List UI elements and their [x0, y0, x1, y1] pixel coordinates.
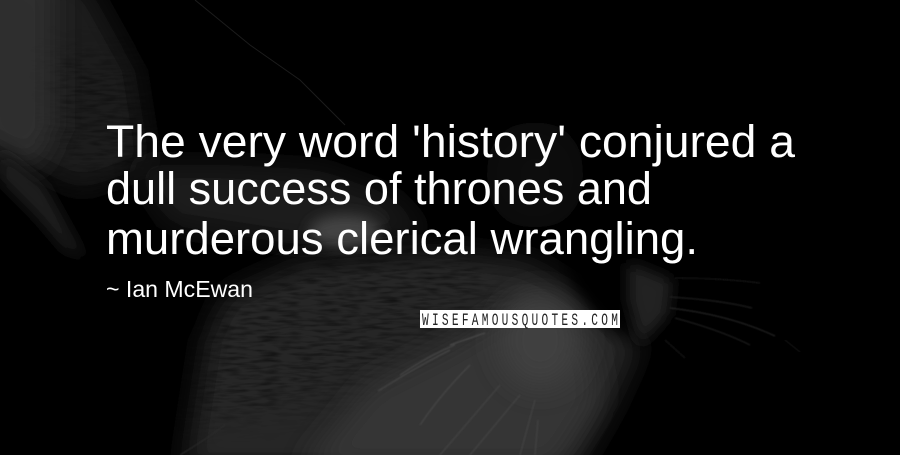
cat nose: [628, 262, 672, 345]
cat ear, upper left: [0, 0, 150, 258]
quote text: [106, 116, 796, 264]
quote line 1: The very word 'history' conjured a: [106, 116, 796, 167]
watermark badge: WISEFAMOUSQUOTES.COM: [422, 312, 618, 331]
long whisker, top: [195, 0, 345, 125]
fur texture: [210, 264, 480, 418]
quote line 3: murderous clerical wrangling.: [106, 213, 698, 264]
whiskers, right: [665, 278, 800, 358]
cat cheek fur: [185, 250, 640, 455]
cat muzzle highlight: [498, 292, 582, 388]
cat muzzle: [300, 300, 600, 455]
cat nose shadow: [565, 250, 632, 340]
cat brow: [130, 165, 430, 245]
cat forehead, faint: [485, 120, 585, 230]
ear fur texture: [82, 77, 130, 132]
author: ~ Ian McEwan: [106, 276, 253, 302]
cat eye: [309, 215, 381, 249]
whiskers, muzzle: [180, 333, 538, 455]
quote line 2: dull success of thrones and: [106, 163, 652, 214]
